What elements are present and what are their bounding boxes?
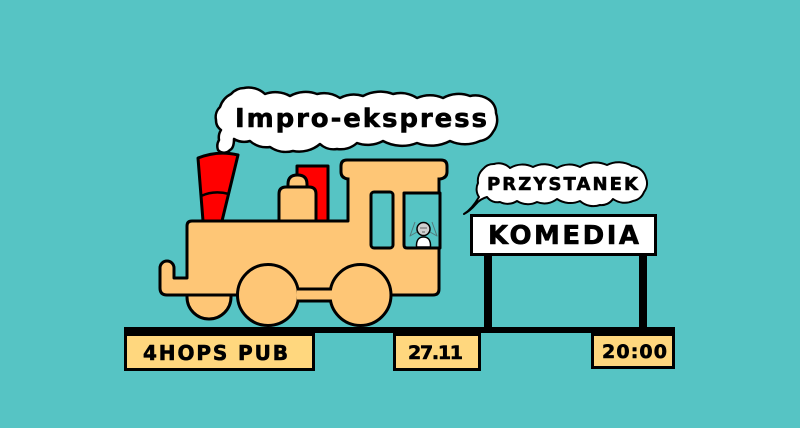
venue text: 4HOPS PUB xyxy=(143,341,288,365)
time text: 20:00 xyxy=(602,341,667,363)
smoke cloud with title xyxy=(216,88,497,153)
locomotive xyxy=(160,153,447,326)
cab roof join xyxy=(350,176,438,182)
cab window xyxy=(371,192,393,248)
date text: 27.11 xyxy=(408,342,463,364)
driver xyxy=(410,222,437,247)
speech bubble xyxy=(464,162,647,214)
steam dome xyxy=(279,175,316,221)
driver window xyxy=(404,193,440,248)
red tank xyxy=(297,166,328,221)
time label xyxy=(592,334,674,368)
sign text: KOMEDIA xyxy=(488,221,639,251)
track xyxy=(124,327,675,333)
title text: Impro-ekspress xyxy=(235,104,487,134)
venue label xyxy=(126,334,314,370)
front drive wheel xyxy=(330,264,391,326)
connecting rod xyxy=(295,289,335,301)
front wheel xyxy=(187,275,231,319)
cab roof xyxy=(341,160,447,179)
driver glasses xyxy=(420,228,427,232)
date label xyxy=(394,334,480,370)
station sign posts xyxy=(484,255,647,329)
rear drive wheel xyxy=(238,264,298,326)
chimney xyxy=(198,153,238,221)
station sign xyxy=(472,216,656,254)
boiler and cab body xyxy=(160,179,439,295)
bubble text: PRZYSTANEK xyxy=(487,174,639,195)
